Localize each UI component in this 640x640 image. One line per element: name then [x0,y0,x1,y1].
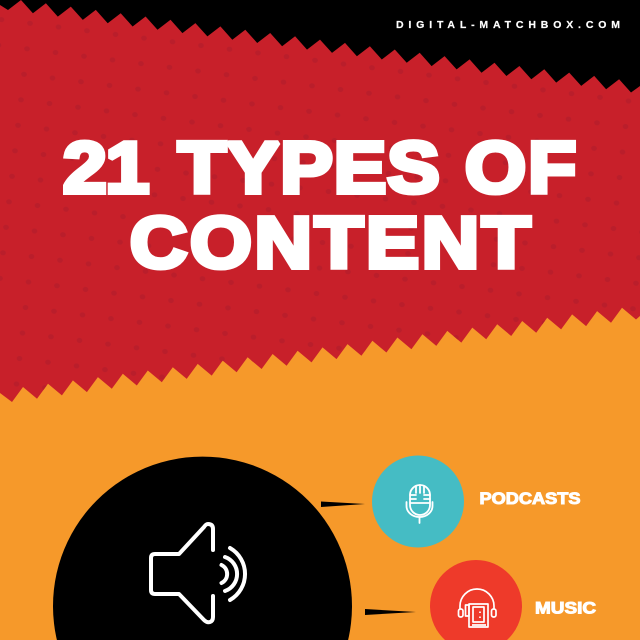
icon: speaker [151,524,245,622]
connector arrow: podcasts [321,502,365,507]
icon: headphones and player [458,589,496,627]
icon: microphone [406,485,432,523]
title [63,127,576,284]
red music circle [430,560,522,640]
title: CONTENT [130,203,530,284]
connector arrow: music [365,609,416,615]
teal podcasts circle [372,456,464,548]
title: 21 [63,127,149,208]
black audio circle [53,457,352,640]
red zigzag banner [0,0,640,402]
website url: DIGITAL-MATCHBOX.COM [396,19,620,31]
title: OF [465,127,576,208]
black top corner [0,0,640,110]
label: music: MUSIC [535,598,596,618]
title: TYPES [178,127,440,208]
label: podcasts: PODCASTS [480,490,580,508]
